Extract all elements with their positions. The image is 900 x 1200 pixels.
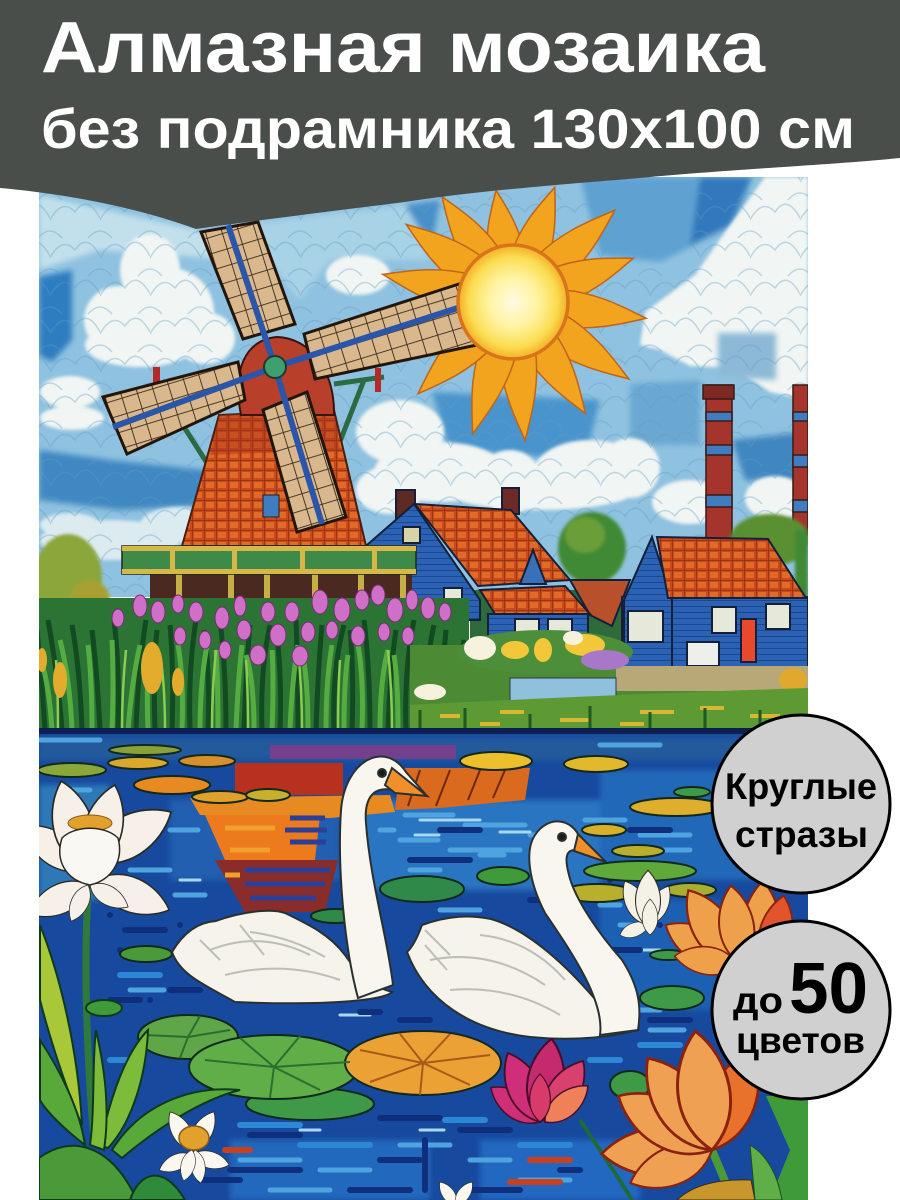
blue house right (622, 537, 808, 667)
orange lotus bottom (580, 1028, 808, 1200)
orange lotus right (664, 884, 794, 976)
badge: round rhinestones: Круглые (725, 766, 877, 807)
blue house with orange roof (367, 488, 630, 645)
reeds and tulips (37, 585, 469, 732)
trees (39, 509, 808, 598)
windmill cap (238, 337, 334, 415)
windmill (103, 222, 477, 608)
sky (39, 177, 808, 597)
windmill struts (184, 377, 384, 474)
small white lotus (620, 870, 670, 938)
pink lotus (490, 1037, 589, 1124)
chimneys (703, 385, 808, 540)
badge: round rhinestones (712, 715, 890, 893)
water (39, 728, 808, 1200)
windmill deck (150, 574, 412, 598)
foreground leaves and stems (39, 925, 240, 1200)
windmill tower (182, 410, 366, 546)
subtitle: без подрамника 130х100 см (41, 97, 855, 160)
title: Алмазная мозаика (41, 8, 766, 88)
water brush strokes (40, 740, 690, 1190)
header banner (0, 0, 900, 229)
sun disc (458, 245, 568, 359)
reflection of windmill (190, 745, 530, 912)
badge: up to 50 colours: до (733, 980, 783, 1021)
badge: up to 50 colours: цветов (736, 1020, 865, 1061)
small lotus bottom left (156, 1107, 477, 1200)
swan left (172, 757, 427, 1003)
badge: round rhinestones: стразы (735, 814, 868, 855)
badge: up to 50 colours (712, 921, 890, 1099)
painting: windmill, swans and lilies (13, 177, 810, 1200)
white lotus (39, 780, 172, 1136)
garden and bank (410, 630, 808, 733)
lily pads (38, 745, 722, 1120)
swan right (407, 821, 639, 1039)
windmill blades (103, 222, 477, 532)
sun rays (379, 181, 648, 442)
badge: up to 50 colours: 50 (789, 949, 868, 1029)
